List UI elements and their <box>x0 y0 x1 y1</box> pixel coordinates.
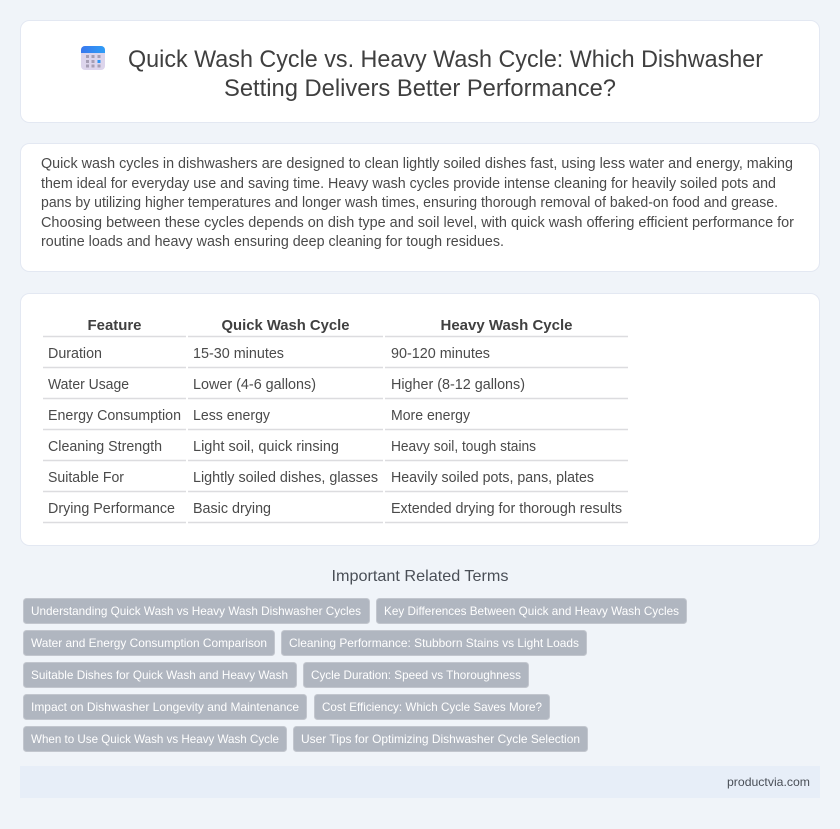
row: suitable for: Heavily soiled pots, pans, plates <box>391 470 594 486</box>
row: cleaning strength: Cleaning Strength <box>48 439 162 455</box>
tag <box>24 598 370 624</box>
tag <box>24 662 296 688</box>
text block: intro paragraph: them ideal for everyday use and saving time. Heavy wash cycles provide intense cleaning for heavily soiled pots and <box>41 176 776 192</box>
footer <box>20 766 820 798</box>
title: Quick Wash Cycle vs. Heavy Wash Cycle: Which Dishwasher <box>128 46 763 73</box>
tag <box>294 726 588 752</box>
tag: Cost Efficiency: Which Cycle Saves More? <box>322 700 542 714</box>
tag <box>304 662 528 688</box>
row: cleaning strength: Light soil, quick rinsing <box>193 439 339 455</box>
row: suitable for <box>48 470 594 486</box>
tag: Understanding Quick Wash vs Heavy Wash Dishwasher Cycles <box>31 604 361 618</box>
tag <box>282 630 586 656</box>
heading: important related terms: Important Related Terms <box>332 568 508 585</box>
panel: intro text <box>20 144 820 272</box>
tag: Cycle Duration: Speed vs Thoroughness <box>311 668 521 682</box>
text block: intro paragraph: Quick wash cycles in dishwashers are designed to clean lightly soiled dishes fast, using less water and energy, making <box>41 156 793 172</box>
tag: Cleaning Performance: Stubborn Stains vs Light Loads <box>289 636 579 650</box>
row: drying performance: Extended drying for thorough results <box>391 501 622 517</box>
tag: Water and Energy Consumption Comparison <box>31 636 267 650</box>
tag <box>24 630 274 656</box>
title <box>128 46 763 102</box>
text block: intro paragraph: pans by utilizing higher temperatures and longer wash times, ensuring thorough removal of baked-on food and grease. <box>41 195 778 211</box>
row: energy consumption: More energy <box>391 408 471 424</box>
row: duration: 90-120 minutes <box>391 346 490 362</box>
tag: Key Differences Between Quick and Heavy Wash Cycles <box>384 604 679 618</box>
row: suitable for: Suitable For <box>48 470 124 486</box>
tag <box>24 694 306 720</box>
tag: Suitable Dishes for Quick Wash and Heavy Wash <box>31 668 288 682</box>
row: drying performance: Drying Performance <box>48 501 175 517</box>
table header: Heavy Wash Cycle <box>440 317 572 334</box>
table header <box>88 317 572 334</box>
tag: User Tips for Optimizing Dishwasher Cycle Selection <box>301 732 580 746</box>
text block: intro paragraph: Choosing between these cycles depends on dish type and soil level, with quick wash offering efficient performance for <box>41 215 794 231</box>
row: duration <box>48 346 490 362</box>
panel: header <box>20 20 820 122</box>
panel: comparison table <box>20 294 820 546</box>
tag: Impact on Dishwasher Longevity and Maintenance <box>31 700 299 714</box>
row: drying performance <box>48 501 622 517</box>
row: cleaning strength: Heavy soil, tough stains <box>391 439 536 455</box>
row: water usage: Higher (8-12 gallons) <box>391 377 525 393</box>
row: energy consumption: Less energy <box>193 408 271 424</box>
row: energy consumption: Energy Consumption <box>48 408 181 424</box>
row: duration: Duration <box>48 346 102 362</box>
tag <box>24 726 286 752</box>
tag: When to Use Quick Wash vs Heavy Wash Cycle <box>31 732 279 746</box>
row: duration: 15-30 minutes <box>193 346 284 362</box>
title: Setting Delivers Better Performance? <box>224 75 616 102</box>
related term tags <box>24 598 686 752</box>
text block: intro paragraph: routine loads and heavy wash ensuring deep cleaning for tough residues. <box>41 234 504 250</box>
tag <box>314 694 550 720</box>
text block: intro paragraph <box>41 156 794 250</box>
icon: calendar <box>81 46 105 70</box>
table header: Feature <box>88 317 142 334</box>
row: water usage: Water Usage <box>48 377 129 393</box>
table header: Quick Wash Cycle <box>222 317 350 334</box>
row: suitable for: Lightly soiled dishes, glasses <box>193 470 378 486</box>
row: water usage <box>48 377 525 393</box>
tag <box>376 598 686 624</box>
row: water usage: Lower (4-6 gallons) <box>193 377 316 393</box>
row: drying performance: Basic drying <box>193 501 271 517</box>
row: cleaning strength <box>48 439 536 455</box>
row: energy consumption <box>48 408 471 424</box>
footer source text: productvia.com <box>727 775 810 789</box>
